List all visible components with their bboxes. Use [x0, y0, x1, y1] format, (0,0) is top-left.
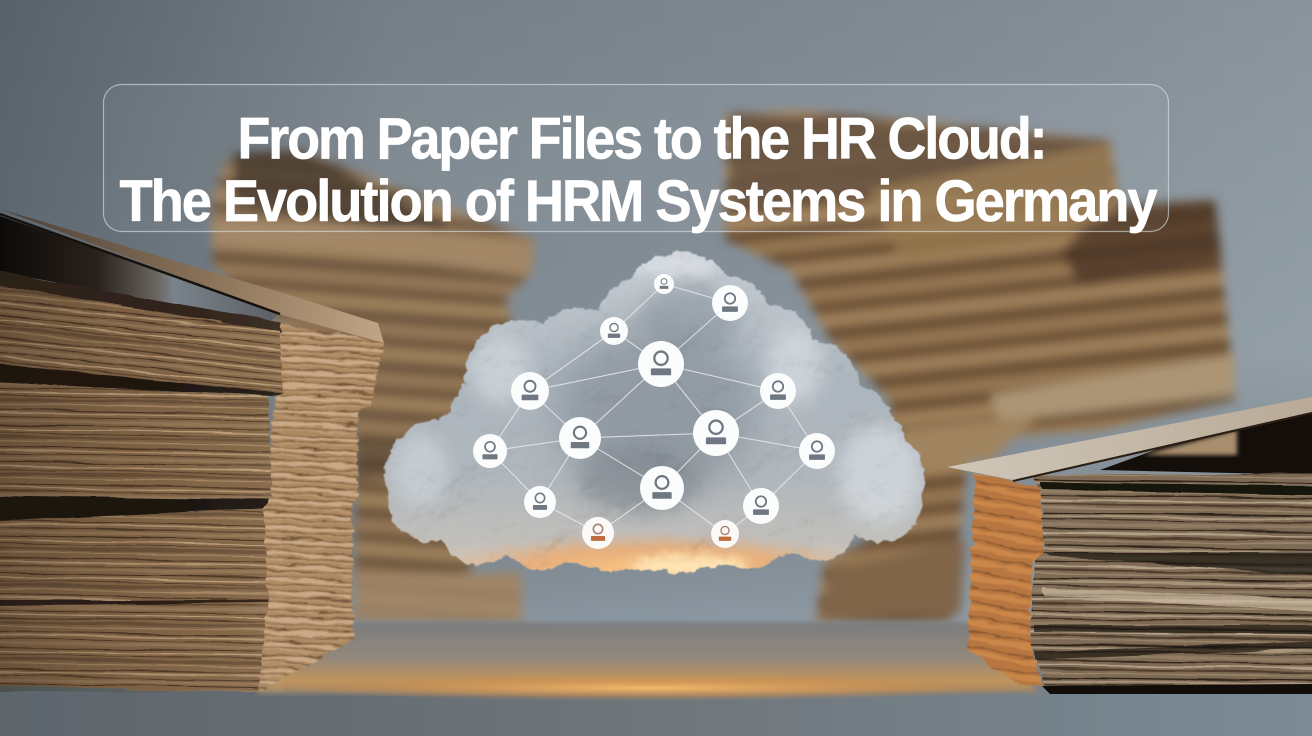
- title panel: [104, 84, 1168, 234]
- lit fore-edge: [968, 472, 1045, 686]
- under-cover wedge: [0, 216, 280, 322]
- icon: person node: [638, 341, 684, 387]
- stack pages: [0, 270, 283, 692]
- title line 2: The Evolution of HRM Systems in Germany: [120, 169, 1157, 234]
- paper stack: left foreground: [0, 209, 384, 692]
- table surface with warm glow: [0, 622, 1312, 736]
- blurred background paper stack: centre left: [212, 150, 535, 622]
- icon: person node: [693, 410, 739, 456]
- stack cover: [0, 209, 384, 343]
- icon: person node: [559, 417, 601, 459]
- cloud: [382, 250, 926, 576]
- glass panel: [104, 84, 1168, 232]
- page fore-edge: [258, 322, 384, 692]
- blurred background paper stack: right: [725, 110, 1235, 622]
- title line 1: From Paper Files to the HR Cloud:: [238, 106, 1046, 172]
- icon: person node: [511, 372, 549, 410]
- icon: person node: [760, 373, 796, 409]
- icon: person node: [473, 434, 507, 468]
- icon: person node: [712, 285, 748, 321]
- under-cover wedge: [1100, 405, 1312, 475]
- icon: person node: [640, 466, 684, 510]
- stack cover: [947, 397, 1312, 480]
- network of people nodes: [473, 274, 835, 549]
- icon: person node: [600, 317, 628, 345]
- icon: person node: [799, 433, 835, 469]
- icon: person node: [654, 274, 674, 294]
- connection lines: [490, 284, 817, 534]
- paper stack: right foreground: [947, 397, 1312, 694]
- icon: person node: [743, 488, 779, 524]
- icon: person node (warm): [582, 517, 614, 549]
- stack pages: [1030, 474, 1312, 692]
- icon: person node: [524, 486, 556, 518]
- icon: person node (warm): [711, 520, 739, 548]
